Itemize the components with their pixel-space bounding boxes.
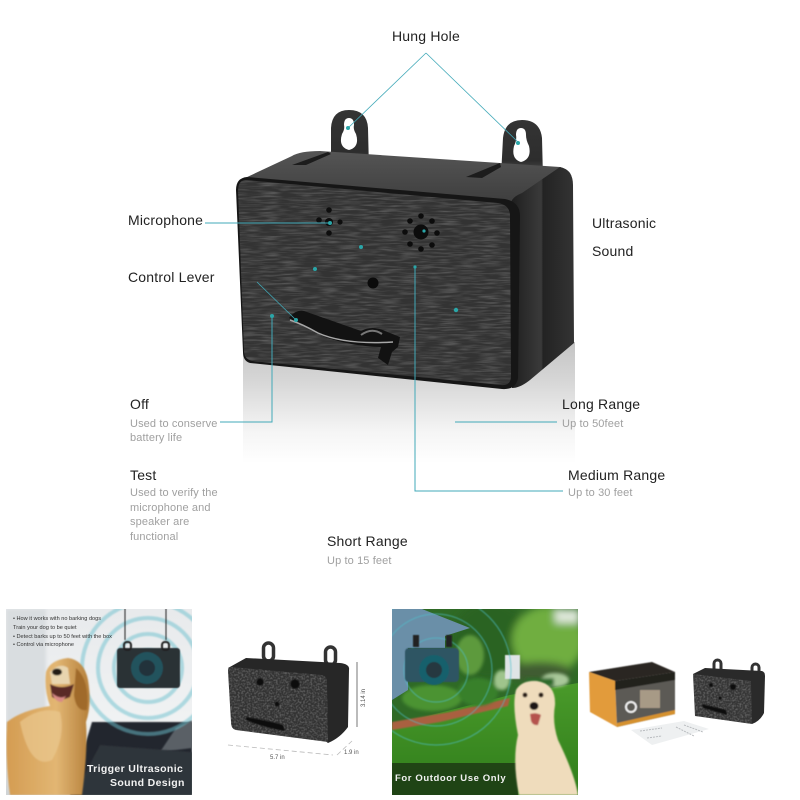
label: Test: Used to verify the bbox=[130, 487, 218, 499]
label: Long Range: Up to 50feet bbox=[562, 418, 623, 430]
device lever and holes bbox=[702, 683, 736, 715]
dimension labels: 3.14 in bbox=[361, 689, 367, 707]
house wall bbox=[392, 609, 470, 700]
product reflection bbox=[243, 342, 575, 470]
card text lines bbox=[640, 725, 703, 738]
label: Test: microphone and bbox=[130, 502, 211, 514]
dimension labels bbox=[270, 689, 367, 761]
caption: Sound Design bbox=[110, 777, 185, 789]
device front textured panel bbox=[235, 175, 515, 390]
label: Medium Range bbox=[568, 467, 665, 499]
sound wave rings bbox=[392, 609, 512, 746]
dimension lines bbox=[228, 741, 352, 755]
label: Off: Used to conserve bbox=[130, 418, 218, 430]
thumbnail 3: for outdoor use only bbox=[392, 609, 578, 795]
thumbnail 4: package contents bbox=[589, 660, 765, 745]
label: Medium Range: Medium Range bbox=[568, 467, 665, 483]
sound wave rings bbox=[80, 609, 192, 737]
device side face bbox=[511, 167, 574, 388]
label: Test: functional bbox=[130, 531, 178, 543]
feature bullet text: • Detect barks up to 50 feet with the box bbox=[13, 634, 112, 640]
caption bbox=[87, 764, 184, 788]
lugs bbox=[714, 660, 759, 678]
device holes and lever bbox=[246, 678, 300, 731]
label: Ultrasonic Sound: Ultrasonic bbox=[592, 215, 656, 231]
device body bbox=[693, 668, 765, 724]
label: Test bbox=[130, 467, 218, 543]
label: Off: Off bbox=[130, 396, 149, 412]
label: Short Range: Up to 15 feet bbox=[327, 555, 392, 567]
lawn bbox=[392, 683, 578, 795]
label: Test: speaker are bbox=[130, 516, 189, 528]
annotation marker dots bbox=[270, 126, 520, 322]
main product: ultrasonic device bbox=[235, 110, 574, 390]
curtain backdrop bbox=[6, 609, 46, 729]
garden shrubs bbox=[402, 635, 569, 711]
dimension labels: 1.9 in bbox=[344, 750, 359, 756]
label: Test: Test bbox=[130, 467, 156, 483]
label: Off bbox=[130, 396, 218, 444]
control lever bbox=[289, 311, 400, 365]
label: Short Range bbox=[327, 533, 408, 567]
trees bbox=[508, 609, 578, 680]
feature bullet text: • Control via microphone bbox=[13, 642, 74, 648]
sofa bbox=[70, 722, 192, 795]
label: Off: battery life bbox=[130, 432, 182, 444]
label: Ultrasonic Sound: Sound bbox=[592, 243, 633, 259]
caption: Trigger Ultrasonic bbox=[87, 763, 183, 775]
label: Long Range: Long Range bbox=[562, 396, 640, 412]
mounted device bbox=[405, 635, 459, 685]
label: Long Range bbox=[562, 396, 640, 430]
lugs bbox=[264, 643, 336, 665]
hanging lug: left bbox=[331, 110, 369, 170]
label: Hung Hole: Hung Hole bbox=[392, 28, 460, 44]
label: Microphone: Microphone bbox=[128, 212, 203, 228]
white gate bbox=[505, 655, 520, 679]
feature bullet text: Train your dog to be quiet bbox=[13, 625, 77, 631]
hanging device bbox=[117, 605, 180, 688]
device front bbox=[228, 667, 328, 742]
feature bullet text bbox=[13, 616, 112, 648]
caption band bbox=[392, 763, 518, 795]
device front bbox=[693, 674, 752, 724]
label: Control Lever: Control Lever bbox=[128, 269, 215, 285]
retail box bbox=[589, 662, 675, 727]
hanging lug: right bbox=[501, 120, 543, 178]
golden retriever bbox=[6, 658, 90, 795]
label: Medium Range: Up to 30 feet bbox=[568, 487, 633, 499]
centre indicator hole bbox=[368, 278, 378, 288]
microphone holes bbox=[316, 207, 343, 236]
feature bullet text: • How it works with no barking dogs bbox=[13, 616, 101, 622]
thumbnail 1: trigger ultrasonic sound design bbox=[6, 609, 192, 795]
caption: For Outdoor Use Only bbox=[395, 773, 506, 784]
label: Short Range: Short Range bbox=[327, 533, 408, 549]
cream retriever bbox=[514, 681, 578, 795]
device front frame bbox=[236, 177, 520, 389]
thumbnail 2: device dimensions bbox=[226, 643, 367, 761]
device body bbox=[228, 658, 349, 743]
instruction card bbox=[631, 721, 709, 745]
flower bed bbox=[392, 698, 510, 730]
speaker grille bbox=[402, 213, 440, 252]
dimension labels: 5.7 in bbox=[270, 755, 285, 761]
device top face bbox=[245, 151, 572, 205]
annotation lines and dots bbox=[205, 53, 563, 491]
top face slots bbox=[292, 152, 501, 178]
